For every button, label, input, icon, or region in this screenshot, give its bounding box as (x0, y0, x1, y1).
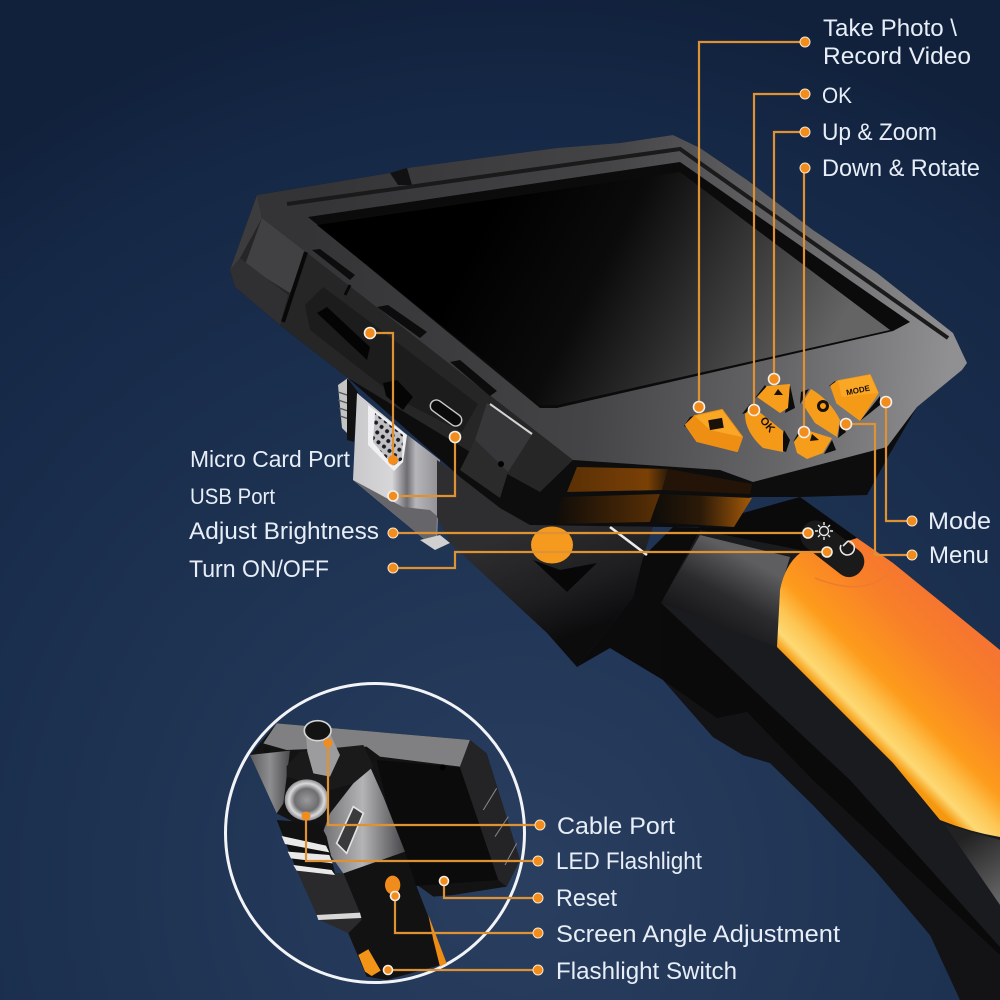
callout: USB port (190, 432, 460, 509)
flash switch (358, 949, 381, 976)
power and brightness panel (795, 515, 870, 583)
callout: LED flashlight: LED Flashlight (556, 848, 702, 875)
orange grip (777, 538, 1000, 837)
corner blocks (230, 195, 533, 498)
callout: take photo record video: Take Photo \ (823, 15, 957, 42)
callout: OK (748, 83, 852, 416)
button: mode (829, 375, 880, 421)
button: OK: OK (757, 415, 777, 435)
callout: menu (840, 418, 989, 569)
callout: screen angle adjustment: Screen Angle Adjustment (556, 921, 840, 948)
callout: micro card port: Micro Card Port (190, 446, 351, 472)
connector (287, 721, 373, 790)
button: brightness (800, 389, 846, 438)
orange button recess (815, 567, 893, 587)
bezel channel (287, 149, 948, 338)
lower grip (343, 852, 447, 980)
callout: USB port: USB Port (190, 484, 276, 509)
button: photo (684, 410, 742, 451)
callout: down and rotate (798, 155, 980, 438)
callout: flashlight switch: Flashlight Switch (556, 958, 737, 985)
button: up (755, 384, 795, 413)
amber reflections (553, 467, 752, 527)
callout: menu: Menu (929, 542, 989, 569)
callout: adjust brightness: Adjust Brightness (189, 518, 379, 545)
rear grip (437, 460, 653, 667)
inset circle: rear view (226, 684, 524, 982)
callout: screen angle adjustment (390, 892, 840, 948)
button: down (793, 429, 836, 459)
icon: power (840, 541, 854, 555)
callout: reset: Reset (556, 885, 617, 912)
callout: reset (440, 876, 617, 912)
callout: up and zoom (768, 119, 937, 384)
body lower shell (230, 135, 967, 528)
callout: down and rotate: Down & Rotate (822, 155, 980, 182)
callout: turn on off (189, 547, 832, 583)
handle bump (663, 680, 1000, 1000)
callout: cable port (324, 738, 675, 840)
side ports (283, 249, 532, 467)
grip block (297, 870, 362, 933)
button: OK (742, 404, 790, 452)
knurled wheel and silver bracket (338, 378, 450, 550)
grey front bezel (257, 135, 967, 482)
callout: flashlight switch (384, 958, 737, 985)
heat-sink stripes (277, 820, 361, 920)
black gasket (308, 162, 910, 408)
callout: up and zoom: Up & Zoom (822, 119, 937, 146)
callout: take photo record video: Record Video (823, 43, 971, 70)
thumb wheel (531, 526, 647, 592)
callout: mode (880, 396, 991, 535)
icon: brightness (815, 522, 833, 540)
inspection camera screen unit (230, 135, 967, 528)
black grip (661, 497, 1000, 1000)
handle highlight section (661, 535, 790, 647)
callout: LED flashlight (302, 812, 702, 875)
side panel (230, 195, 573, 492)
angle wheel (385, 876, 400, 894)
grip reflection (945, 825, 1000, 905)
callout: take photo record video (694, 15, 971, 412)
orange side strip (428, 915, 447, 967)
display screen (317, 172, 890, 405)
bezel top tab shadow (390, 168, 412, 185)
handle upper band (661, 530, 1000, 947)
camera handle (338, 378, 1000, 1000)
callout: turn on off: Turn ON/OFF (189, 556, 329, 583)
button: mode: MODE (845, 383, 871, 397)
callout: OK: OK (822, 83, 852, 108)
callout: cable port: Cable Port (557, 813, 675, 840)
neck shadow (577, 527, 703, 680)
callout: micro card port (190, 328, 398, 472)
LED lens (285, 779, 329, 821)
tablet back (250, 723, 520, 897)
silver housing (320, 767, 405, 873)
callout: adjust brightness (189, 518, 813, 545)
callout: mode: Mode (928, 508, 991, 535)
